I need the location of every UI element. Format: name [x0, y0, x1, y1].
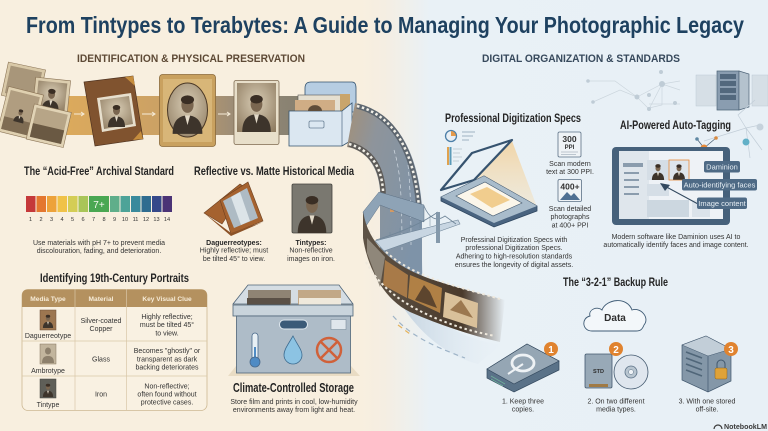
caption: 400+ ppi: photographs [551, 214, 590, 221]
archive folder box [289, 82, 356, 146]
caption: tintypes: Tintypes: [296, 240, 326, 247]
caption 1: copies. [512, 406, 534, 414]
badge 3: 3 [728, 345, 734, 356]
icon: hard drive [487, 344, 559, 392]
icon: cloud [584, 301, 646, 331]
table: Non-reflective; [144, 384, 190, 390]
pH numbers: 1 [29, 217, 32, 223]
icon: 400+ ppi card [558, 180, 582, 202]
caption: tintypes [287, 240, 335, 263]
timeline band [65, 96, 305, 135]
pH numbers: 3 [50, 217, 53, 223]
caption: Store film and prints in cool, low-humidity [230, 399, 358, 406]
icon: bridge [375, 206, 460, 251]
pH numbers: 13 [153, 217, 160, 223]
icon: tintype [292, 184, 332, 233]
caption: daguerreotypes: be tilted 45° to view. [203, 255, 265, 263]
caption 3: off-site. [696, 406, 718, 414]
arrows on timeline [74, 112, 230, 116]
icon: 300 ppi card: 300 [562, 134, 577, 144]
panel: professional digitization specs [441, 113, 594, 269]
table: Copper [90, 326, 113, 333]
table: Iron [95, 392, 107, 398]
panel: acid-free standard [24, 166, 174, 255]
badge 1 [544, 342, 558, 356]
pH numbers: 4 [60, 217, 64, 223]
carte de visite portrait [234, 80, 279, 144]
pH numbers: 14 [164, 217, 170, 223]
pH scale: 7+ [93, 200, 105, 211]
caption: tintypes: images on iron. [287, 256, 335, 263]
heading: left section: IDENTIFICATION & PHYSICAL PRESERVATION [77, 53, 305, 65]
caption: daguerreotypes: Highly reflective; must [200, 248, 268, 254]
icon: thermometer [250, 333, 260, 367]
table: Tintype [37, 402, 59, 409]
badge 3 [724, 342, 738, 356]
caption: tintypes: Non-reflective [289, 248, 333, 254]
heading: Reflective vs. Matte Historical Media [194, 166, 354, 178]
caption: 300 ppi: text at 300 PPI. [546, 169, 594, 176]
icon: 300 ppi card: PPI [565, 145, 575, 151]
heading: Identifying 19th-Century Portraits [40, 273, 189, 285]
panel: ai-powered auto-tagging [603, 100, 764, 249]
table: Highly reflective; [141, 314, 193, 321]
heading: right section: DIGITAL ORGANIZATION & STANDARDS [482, 53, 680, 65]
table: Ambrotype [31, 368, 65, 375]
heading: The “Acid-Free” Archival Standard [24, 166, 174, 178]
tag: auto-identifying faces: Auto-identifying faces [684, 180, 756, 190]
panel: identifying portraits [22, 273, 207, 410]
icon: no light wheel [317, 338, 341, 362]
pH numbers: 9 [113, 217, 116, 223]
pH numbers: 2 [39, 217, 43, 223]
caption: specs: Professinal Digitization Specs with [461, 237, 567, 244]
caption: Modern software like Daminion uses AI to [612, 234, 740, 241]
icon: notebooklm mark [714, 425, 722, 429]
photo album [84, 76, 143, 146]
caption: discolouration, fading, and deterioration. [37, 248, 161, 255]
icon: daguerreotype case [204, 182, 263, 236]
icon: ssd and disc [585, 354, 648, 389]
pH numbers: 8 [102, 217, 106, 223]
icon: server and lock [682, 336, 731, 392]
pH numbers [29, 217, 170, 223]
badge 1: 1 [548, 345, 554, 356]
icon: 300 ppi card [558, 132, 581, 157]
icon: mini charts [446, 130, 475, 165]
table [22, 290, 207, 410]
heading: Climate-Controlled Storage [233, 381, 354, 395]
cloud label: Data [604, 313, 626, 324]
scattered sepia photographs [0, 62, 71, 148]
caption: daguerreotypes [200, 240, 268, 263]
pH numbers: 10 [122, 217, 128, 223]
table: must be tilted 45° [140, 321, 194, 329]
table: Key Visual Clue [142, 296, 192, 303]
caption: 400+ ppi: at 400+ PPI [552, 222, 588, 230]
table: often found without [137, 392, 197, 398]
table: Becomes "ghostly" or [134, 348, 200, 355]
heading: AI-Powered Auto-Tagging [620, 120, 731, 132]
table: Daguerreotype [25, 333, 71, 340]
icon: tablet [612, 147, 730, 225]
pH numbers: 6 [81, 217, 85, 223]
tag: daminion [704, 161, 740, 172]
table: Silver-coated [81, 318, 121, 325]
icon: 400+ ppi card: 400+ [560, 182, 580, 192]
caption: 300 ppi: Scan modern [549, 161, 591, 168]
caption 1: 1. Keep three [502, 398, 544, 406]
panel: climate-controlled storage [228, 285, 360, 414]
caption 2: 2. On two different [587, 398, 645, 406]
caption: specs: ensures the longevity of digital assets. [455, 262, 573, 269]
network [691, 100, 764, 161]
caption: 400+ ppi: Scan detailed [549, 206, 591, 213]
badge 2 [609, 342, 623, 356]
network and server graphic [586, 70, 768, 111]
icon: scanner [441, 140, 537, 227]
film ribbon to digital [347, 103, 505, 364]
pH scale [26, 196, 172, 212]
heading: Professional Digitization Specs [445, 113, 581, 125]
table: Material [89, 296, 114, 303]
table: protective cases. [141, 400, 193, 406]
pH numbers: 7 [92, 217, 95, 223]
pH numbers: 5 [71, 217, 74, 223]
icon: ssd and disc: STD [593, 369, 604, 375]
pH numbers: 11 [133, 217, 138, 223]
table: Glass [92, 356, 110, 364]
panel: reflective vs matte [194, 166, 354, 263]
tag: image content: Image content [698, 199, 747, 208]
caption: specs: Adhering to high-resolution standards [456, 254, 573, 260]
caption: Use materials with pH 7+ to prevent media [33, 240, 165, 247]
table: to view. [155, 330, 179, 338]
panel: 3-2-1 backup rule [487, 277, 738, 414]
framed portrait [160, 74, 216, 146]
caption: automatically identify faces and image content. [603, 242, 749, 249]
tag: daminion: Daminion [706, 162, 738, 172]
badge 2: 2 [613, 345, 619, 356]
table: transparent as dark [137, 356, 198, 364]
caption 2: media types. [596, 406, 636, 414]
icon: storage box [228, 285, 360, 376]
heading: The “3-2-1” Backup Rule [563, 277, 668, 289]
pH numbers: 12 [143, 217, 149, 223]
caption: specs: professional Digitization Specs. [465, 245, 563, 252]
caption: environments away from light and heat. [233, 407, 355, 414]
caption 3: 3. With one stored [679, 398, 735, 406]
icon: water drop [284, 336, 302, 364]
caption: daguerreotypes: Daguerreotypes: [206, 240, 262, 247]
table: Media Type [30, 296, 66, 303]
table: backing deteriorates [135, 364, 199, 372]
